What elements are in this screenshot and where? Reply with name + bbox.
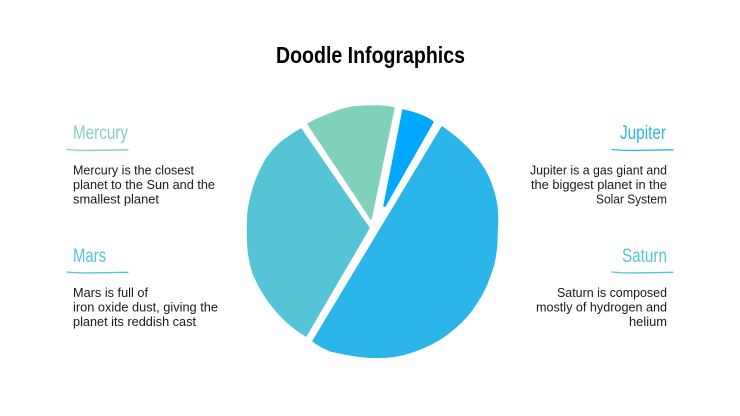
text: Mercury description: smallest planet [73, 192, 160, 206]
text: Mercury description: planet to the Sun and the [73, 178, 215, 192]
text: Jupiter description: Jupiter is a gas giant and [530, 164, 667, 178]
text: Mars description: planet its reddish cast [73, 315, 196, 329]
underline: Jupiter [612, 148, 674, 151]
heading: Jupiter: Jupiter [620, 123, 667, 144]
text: Jupiter description: the biggest planet in the [531, 178, 667, 192]
heading: Mercury: Mercury [73, 123, 128, 144]
pie slice: bright blue [384, 110, 433, 206]
text: Jupiter description: Solar System [596, 192, 667, 206]
text: Jupiter description [530, 164, 667, 206]
panel: Jupiter [530, 123, 674, 206]
heading: Saturn: Saturn [622, 246, 667, 267]
text: Mars description [73, 286, 218, 329]
pie slice: largest blue [313, 127, 498, 357]
text: Saturn description: Saturn is composed [557, 286, 667, 300]
panel: Mercury [66, 123, 215, 206]
pie slice: green [308, 106, 394, 219]
text: Mars description: Mars is full of [73, 286, 148, 300]
underline: Mercury [66, 148, 128, 151]
panel: Mars [66, 246, 218, 329]
title: Doodle Infographics [276, 42, 465, 68]
text: Mercury description [73, 164, 215, 206]
text: Mars description: iron oxide dust, giving the [73, 300, 218, 314]
pie chart [248, 106, 498, 357]
text: Mercury description: Mercury is the closest [73, 164, 194, 178]
heading: Mars: Mars [73, 246, 106, 267]
underline: Saturn [612, 271, 674, 274]
text: Saturn description: helium [629, 315, 667, 329]
underline: Mars [66, 271, 128, 274]
text: Saturn description [536, 286, 667, 329]
panel: Saturn [536, 246, 674, 329]
text: Saturn description: mostly of hydrogen and [536, 300, 667, 314]
pie slice: teal [248, 129, 369, 336]
